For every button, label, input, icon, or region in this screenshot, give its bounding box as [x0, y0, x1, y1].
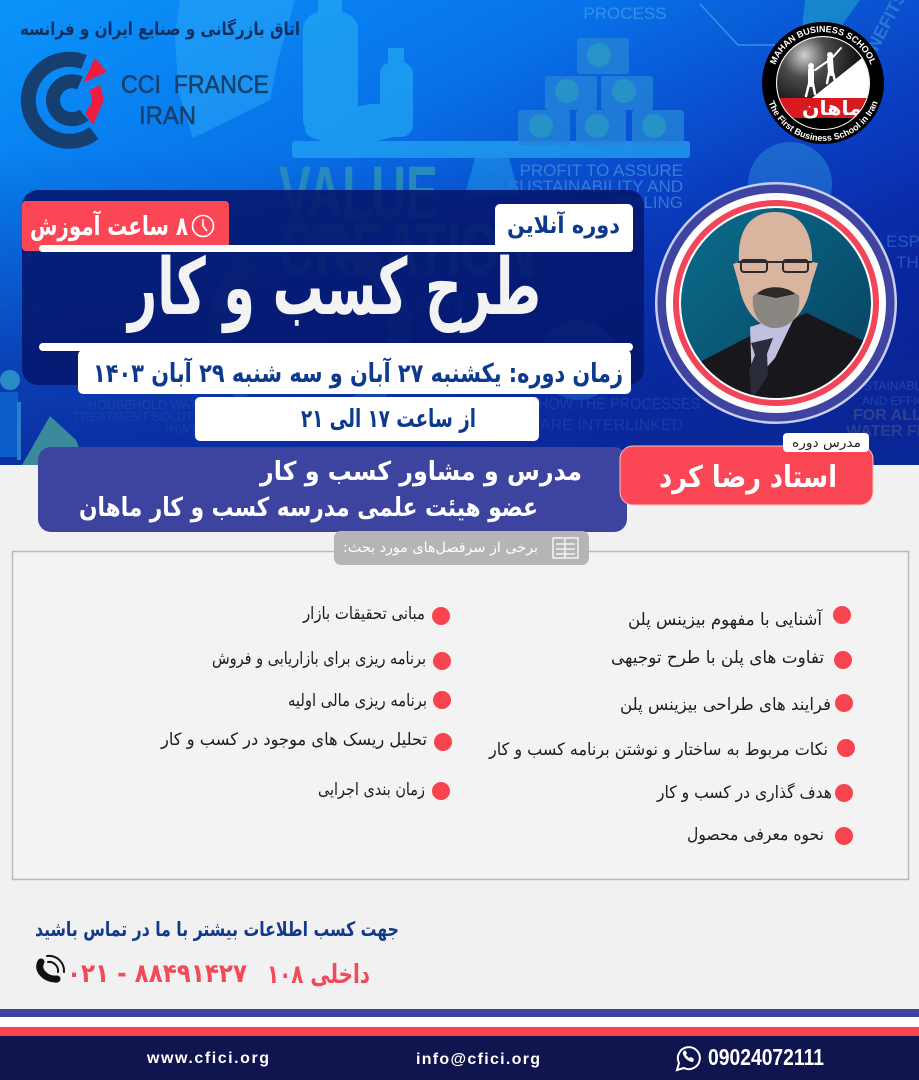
- text: online course: دوره آنلاین: [507, 210, 620, 239]
- contact heading: جهت کسب اطلاعات بیشتر با ما در تماس باشید: [35, 917, 399, 941]
- background illustration: bottles and scale: [292, 0, 690, 194]
- text: faculty member: عضو هیئت علمی مدرسه کسب و کار ماهان: [79, 493, 538, 523]
- background label: selling water: SELLING WATER: [26, 300, 162, 319]
- background illustration: people circle: [748, 142, 832, 195]
- background label: value creation: [280, 166, 436, 190]
- text: teacher name: استاد رضا کرد: [659, 460, 837, 495]
- stripe: blue: [0, 1009, 919, 1017]
- text: website: www.cfici.org: [146, 1050, 269, 1067]
- text: course time: از ساعت ۱۷ الی ۲۱: [301, 404, 476, 433]
- logo: CCI: [28, 58, 269, 141]
- topic list: right column: [488, 606, 855, 845]
- icon: telephone: [40, 956, 64, 979]
- header background: [0, 0, 919, 465]
- topic 2: تفاوت های پلن با طرح توجیهی: [611, 648, 824, 668]
- photo: [681, 208, 871, 398]
- logo mark: [28, 58, 107, 141]
- moustache: [757, 287, 795, 298]
- stripe: white: [0, 1017, 919, 1027]
- text: course date: زمان دوره: یکشنبه ۲۷ آبان و سه شنبه ۲۹ آبان ۱۴۰۳: [93, 357, 623, 389]
- portrait: [655, 182, 897, 424]
- background label: processes: HOW THE PROCESSES: [538, 396, 700, 413]
- logo ring text: The First Business School in Iran: [769, 100, 878, 141]
- background label: profit: PROFIT TO ASSURE: [520, 161, 683, 180]
- topic 3: فرایند های طراحی بیزینس پلن: [620, 695, 831, 715]
- background label: processes: [539, 398, 700, 430]
- background label: sustainable: [846, 382, 919, 436]
- icon: whatsapp: [677, 1047, 700, 1070]
- beard: [753, 289, 799, 328]
- date box: [78, 350, 631, 394]
- text: course teacher: مدرس دوره: [792, 436, 861, 451]
- background illustration: person and hill: [0, 370, 86, 465]
- logo text: [121, 71, 269, 130]
- icon: clock: [192, 216, 214, 236]
- background illustration: map shape: [175, 0, 295, 138]
- topic 9: برنامه ریزی مالی اولیه: [288, 691, 427, 711]
- panel: topics box: [12, 552, 908, 880]
- text: teacher role: مدرس و مشاور کسب و کار: [258, 457, 582, 487]
- stripe: red: [0, 1027, 919, 1036]
- tie: [749, 338, 773, 400]
- background label: value creation: CREATION: [279, 208, 535, 291]
- background illustration: blue circle: [558, 394, 598, 400]
- background label: profit: SUSTAINABILITY AND: [508, 177, 683, 196]
- background label: household: TREATMENT SOLUTIONS: [73, 410, 224, 424]
- contact extension: داخلی ۱۰۸: [267, 960, 370, 990]
- logo persian name: ماهان: [802, 96, 862, 120]
- text: 8 hours: ۸ ساعت آموزش: [30, 210, 188, 242]
- head: [733, 212, 818, 328]
- badge: online course: [495, 204, 633, 252]
- shirt: [750, 320, 794, 366]
- heading: chamber of commerce: اتاق بازرگانی و صنایع ایران و فرانسه: [20, 18, 300, 40]
- teacher name badge: [620, 446, 873, 505]
- text: mobile: 09024072111: [708, 1044, 824, 1070]
- logo: Mahan Business School: [762, 22, 884, 144]
- topic 10: تحلیل ریسک های موجود در کسب و کار: [160, 730, 427, 750]
- background label: household: HOUSEHOLD WATER: [88, 398, 214, 412]
- divider: top white line: [39, 245, 633, 252]
- dark title panel: [22, 190, 644, 385]
- divider: lower white line: [39, 343, 633, 351]
- background label: processes: ARE INTERLINKED: [540, 417, 683, 434]
- background illustration: leaf and stem: [802, 0, 860, 26]
- teacher description panel: [38, 447, 627, 532]
- background illustration: coins: [529, 43, 666, 138]
- logo text: IRAN: [139, 102, 196, 130]
- jacket: [701, 313, 864, 398]
- background illustration: money boxes: [518, 38, 684, 145]
- topics heading pill: [334, 531, 589, 565]
- climbers: [806, 48, 841, 96]
- background label: household: [74, 400, 196, 436]
- background illustration: shade: [0, 150, 919, 465]
- icon: topics: [553, 538, 578, 558]
- background illustration: arc ring: [232, 394, 388, 397]
- topic 7: مبانی تحقیقات بازار: [302, 604, 425, 624]
- glasses: [738, 260, 812, 272]
- logo text: CCI FRANCE: [121, 71, 269, 99]
- topic 5: هدف گذاری در کسب و کار: [656, 782, 832, 803]
- footer: [0, 1036, 919, 1080]
- contact phone number: [67, 959, 370, 990]
- background label: profit: SCALING: [608, 193, 683, 212]
- teacher label: [783, 433, 869, 452]
- time box: [195, 397, 539, 441]
- topic 8: برنامه ریزی برای بازاریابی و فروش: [212, 649, 426, 669]
- background label: responsibility: [887, 236, 919, 268]
- background label: within: Within a comp: [330, 290, 469, 315]
- topic 1: آشنایی با مفهوم بیزینس پلن: [628, 608, 823, 630]
- text: topics heading: برخی از سرفصل‌های مورد بحث:: [343, 540, 538, 556]
- text: email: info@cfici.org: [416, 1051, 540, 1068]
- background label: household: (HWTS): [165, 422, 210, 436]
- logo ring text: [769, 26, 878, 141]
- badge: training hours: [22, 201, 229, 251]
- logo ring text: MAHAN BUSINESS SCHOOL: [770, 26, 875, 65]
- topic 11: زمان بندی اجرایی: [318, 780, 425, 800]
- topic 4: نکات مربوط به ساختار و نوشتن برنامه کسب و کار: [488, 740, 828, 760]
- topic 6: نحوه معرفی محصول: [687, 825, 824, 845]
- background label: process: PROCESS: [583, 4, 667, 23]
- title: طرح کسب و کار: [125, 243, 541, 333]
- topic list: left column: [160, 604, 452, 800]
- background illustration: connector line: [700, 4, 775, 45]
- background label: profit: [508, 164, 682, 208]
- contact phone number: ۰۲۱ - ۸۸۴۹۱۴۲۷: [67, 959, 247, 989]
- background label: value creation: VALUE: [279, 151, 438, 234]
